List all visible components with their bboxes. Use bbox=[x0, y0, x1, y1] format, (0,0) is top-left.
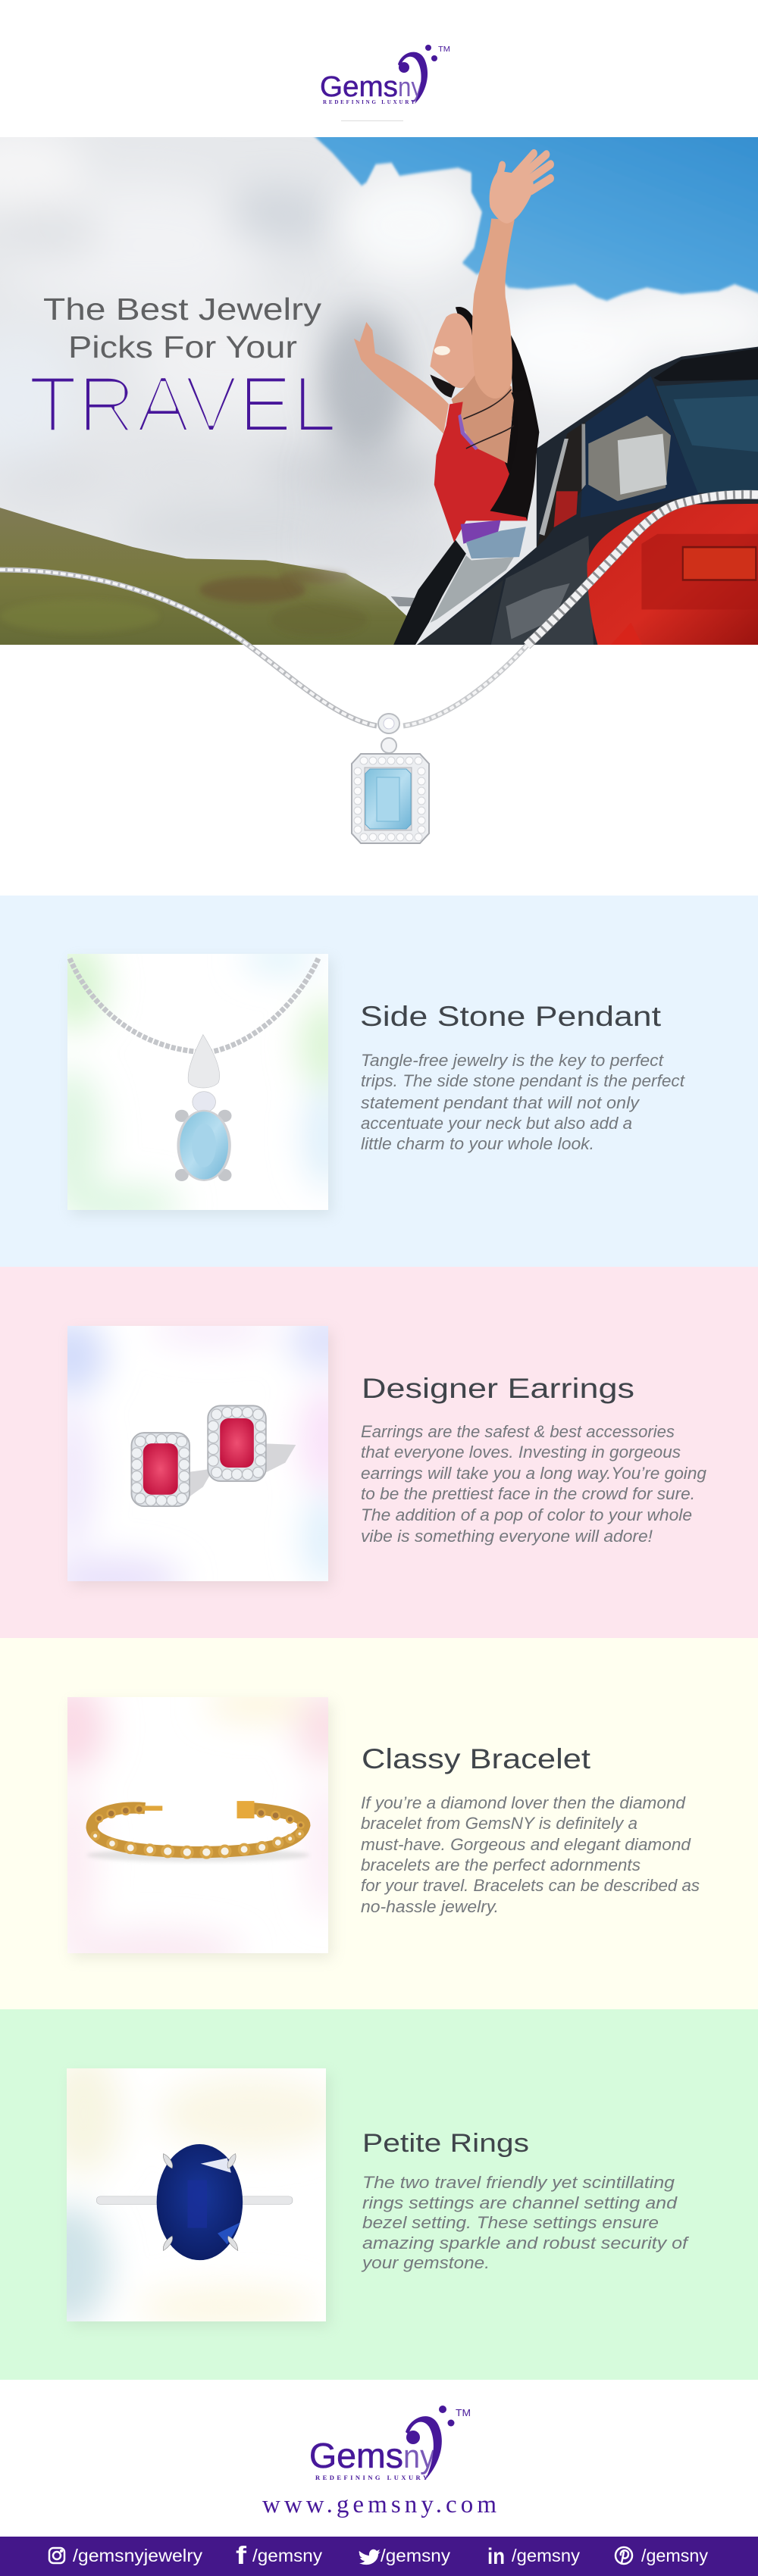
text block: designer earrings: The addition of a pop of color to your whole bbox=[361, 1505, 692, 1524]
icon: twitter bbox=[359, 2549, 381, 2565]
text block: side stone pendant: accentuate your neck but also add a bbox=[361, 1114, 632, 1133]
text block: side stone pendant: Tangle-free jewelry is the key to perfect bbox=[361, 1051, 664, 1070]
footer logo: REDEFINING LUXURY bbox=[315, 2474, 428, 2481]
woman: hand bbox=[490, 154, 550, 224]
text block: petite rings: bezel setting. These settings ensure bbox=[362, 2213, 659, 2232]
icon: octagon halo bbox=[352, 754, 429, 843]
text block: petite rings: your gemstone. bbox=[361, 2253, 490, 2272]
footer logo: Gems bbox=[309, 2436, 403, 2475]
prongs bbox=[175, 1110, 232, 1181]
thumbnail: classy bracelet bbox=[67, 1697, 334, 1960]
text block: designer earrings: that everyone loves. Investing in gorgeous bbox=[361, 1443, 681, 1462]
footer logo: ny bbox=[403, 2438, 435, 2475]
hero title: TRAVEL bbox=[28, 361, 337, 449]
woman: hair over shoulder bbox=[490, 389, 536, 517]
header logo: REDEFINING LUXURY bbox=[323, 99, 415, 105]
woman: raised arm bbox=[472, 218, 515, 399]
section panel: classy bracelet bbox=[0, 1638, 758, 2009]
social bar: /gemsny bbox=[512, 2546, 581, 2565]
text block: classy bracelet: no-hassle jewelry. bbox=[361, 1897, 499, 1916]
text block: side stone pendant: little charm to your whole look. bbox=[361, 1134, 594, 1153]
woman: hair behind bbox=[456, 307, 539, 521]
hero photo: woman leaning out of car window bbox=[0, 127, 758, 649]
necklace chain bbox=[70, 958, 196, 1052]
footer logo: TM bbox=[456, 2407, 471, 2418]
header logo: ny bbox=[398, 71, 423, 102]
text block: classy bracelet: bracelet from GemsNY is definitely a bbox=[361, 1814, 637, 1833]
website url: www.gemsny.com bbox=[262, 2491, 496, 2518]
bracelet clasp bbox=[237, 1801, 254, 1818]
text block: designer earrings: vibe is something everyone will adore! bbox=[361, 1527, 653, 1546]
woman: face bbox=[431, 313, 478, 388]
section panel: designer earrings bbox=[0, 1267, 758, 1638]
woman: chest bbox=[452, 373, 514, 464]
text block: side stone pendant bbox=[361, 1051, 685, 1153]
text block: classy bracelet: for your travel. Bracelets can be described as bbox=[361, 1876, 700, 1895]
thumbnail: designer earrings bbox=[67, 1326, 334, 1588]
icon: aquamarine stone bbox=[365, 769, 411, 829]
social bar: /gemsnyjewelry bbox=[73, 2546, 203, 2565]
left earring bbox=[131, 1433, 190, 1506]
social bar: /gemsny bbox=[252, 2546, 323, 2565]
clouds bbox=[315, 169, 758, 567]
text block: designer earrings: Earrings are the safest & best accessories bbox=[361, 1422, 675, 1441]
icon: instagram bbox=[49, 2548, 64, 2563]
heading: designer earrings: Designer Earrings bbox=[362, 1373, 634, 1404]
earring shadows bbox=[261, 1443, 296, 1475]
social bar: /gemsny bbox=[381, 2546, 451, 2565]
hills bbox=[0, 508, 407, 649]
woman: red top bbox=[434, 402, 528, 542]
right half of hero: sky, woman and car bbox=[311, 133, 758, 649]
ring prongs bbox=[163, 2154, 173, 2168]
car lower body reflections bbox=[490, 536, 594, 649]
left half of hero: clouds and hills bbox=[0, 127, 428, 649]
footer logo bbox=[309, 2406, 471, 2481]
right earring bbox=[208, 1405, 266, 1481]
bracelet band bbox=[92, 1808, 305, 1852]
section panel: side stone pendant bbox=[0, 896, 758, 1267]
icon: linkedin: in bbox=[487, 2544, 505, 2569]
tail light bbox=[587, 504, 758, 649]
heading: petite rings: Petite Rings bbox=[362, 2129, 529, 2158]
text block: designer earrings bbox=[361, 1422, 707, 1546]
text block: petite rings: amazing sparkle and robust security of bbox=[362, 2234, 690, 2252]
blue sky bbox=[311, 133, 758, 301]
text block: petite rings bbox=[361, 2173, 690, 2272]
thumbnail: petite ring bbox=[67, 2068, 330, 2327]
woman: skirt bbox=[461, 521, 500, 544]
car front pillar bbox=[392, 540, 466, 649]
header logo: Gems bbox=[320, 71, 398, 103]
hero necklace chain and emerald-cut pendant bbox=[0, 495, 758, 843]
text block: petite rings: The two travel friendly yet scintillating bbox=[362, 2173, 675, 2192]
section panel: petite rings bbox=[0, 2009, 758, 2380]
car door frame bbox=[537, 422, 586, 547]
hero title bbox=[28, 292, 337, 449]
sapphire stone bbox=[157, 2144, 243, 2260]
ring band bbox=[97, 2196, 293, 2204]
text block: classy bracelet: If you’re a diamond lover then the diamond bbox=[361, 1793, 686, 1812]
header logo bbox=[320, 45, 450, 105]
text block: classy bracelet bbox=[361, 1793, 700, 1916]
text block: petite rings: rings settings are channel setting and bbox=[362, 2193, 678, 2212]
woman: left arm and hand bbox=[354, 322, 449, 433]
thumbnail: side stone pendant bbox=[67, 954, 334, 1217]
hero title: Picks For Your bbox=[68, 330, 297, 364]
text block: classy bracelet: must-have. Gorgeous and elegant diamond bbox=[361, 1835, 691, 1854]
social bar bbox=[0, 2537, 758, 2576]
text block: designer earrings: to be the prettiest face in the crowd for sure. bbox=[361, 1484, 695, 1503]
text block: designer earrings: earrings will take you a long way.You’re going bbox=[361, 1464, 707, 1483]
text block: classy bracelet: bracelets are the perfect adornments bbox=[361, 1855, 641, 1874]
icon: facebook: f bbox=[236, 2541, 247, 2569]
car body bbox=[413, 347, 758, 649]
pendant stones bbox=[175, 1034, 232, 1181]
heading: classy bracelet: Classy Bracelet bbox=[362, 1743, 591, 1774]
heading: side stone pendant: Side Stone Pendant bbox=[360, 1001, 662, 1032]
hero title: The Best Jewelry bbox=[43, 292, 322, 327]
text block: side stone pendant: trips. The side stone pendant is the perfect bbox=[361, 1071, 685, 1090]
bracelet shadow bbox=[87, 1849, 309, 1862]
bracelet stones bbox=[92, 1831, 302, 1858]
social bar: /gemsny bbox=[641, 2546, 708, 2565]
icon: pendant bail stones bbox=[378, 714, 399, 733]
icon: pinterest bbox=[615, 2547, 632, 2564]
text block: side stone pendant: statement pendant that will not only bbox=[361, 1093, 641, 1112]
header logo: TM bbox=[438, 45, 450, 54]
